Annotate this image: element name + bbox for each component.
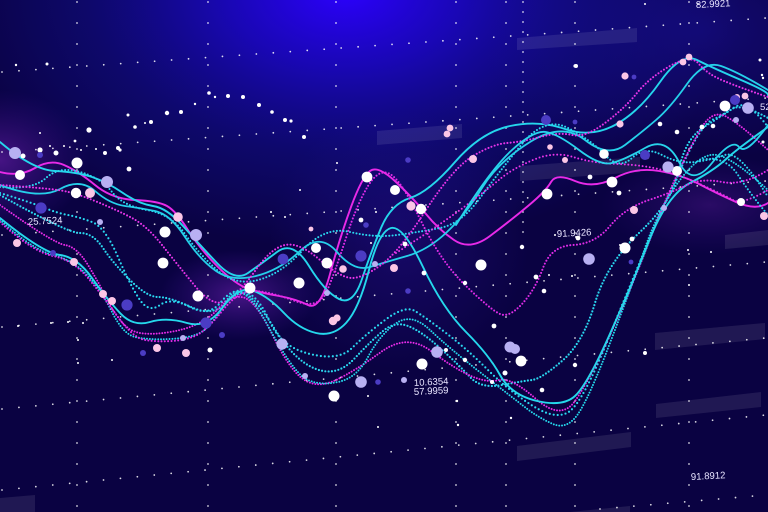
periwinkle data nodes <box>9 102 754 388</box>
line: magenta dotted upper <box>0 59 768 303</box>
line: cyan solid second <box>0 65 768 278</box>
arc of white dots <box>20 91 306 171</box>
line: cyan right <box>456 125 768 225</box>
value label: 91.8912 <box>691 470 726 483</box>
line: cyan dotted middle <box>0 105 768 415</box>
line: magenta lower <box>0 115 768 411</box>
white data nodes <box>15 64 745 402</box>
line: magenta solid peak <box>0 163 768 306</box>
value labels pair: 57.9959 <box>414 385 449 398</box>
pink data nodes <box>13 54 768 357</box>
value label: 25.7524 <box>28 215 63 228</box>
value label: 91.9426 <box>557 227 592 240</box>
line: cyan dotted lower <box>0 107 768 386</box>
line: cyan bottom <box>0 155 768 426</box>
line: cyan solid lower <box>0 127 768 403</box>
dark violet data nodes <box>35 75 740 385</box>
value labels pair: 10.6354 <box>414 376 449 389</box>
line: cyan dotted upper <box>0 124 768 282</box>
line: cyan dotted far right <box>700 159 768 215</box>
line: pale to cyan solid <box>0 58 768 300</box>
value labels pair <box>414 376 449 398</box>
line: magenta dotted right <box>396 155 768 253</box>
wave lines chart <box>0 58 768 426</box>
line: magenta bottom <box>0 170 768 341</box>
